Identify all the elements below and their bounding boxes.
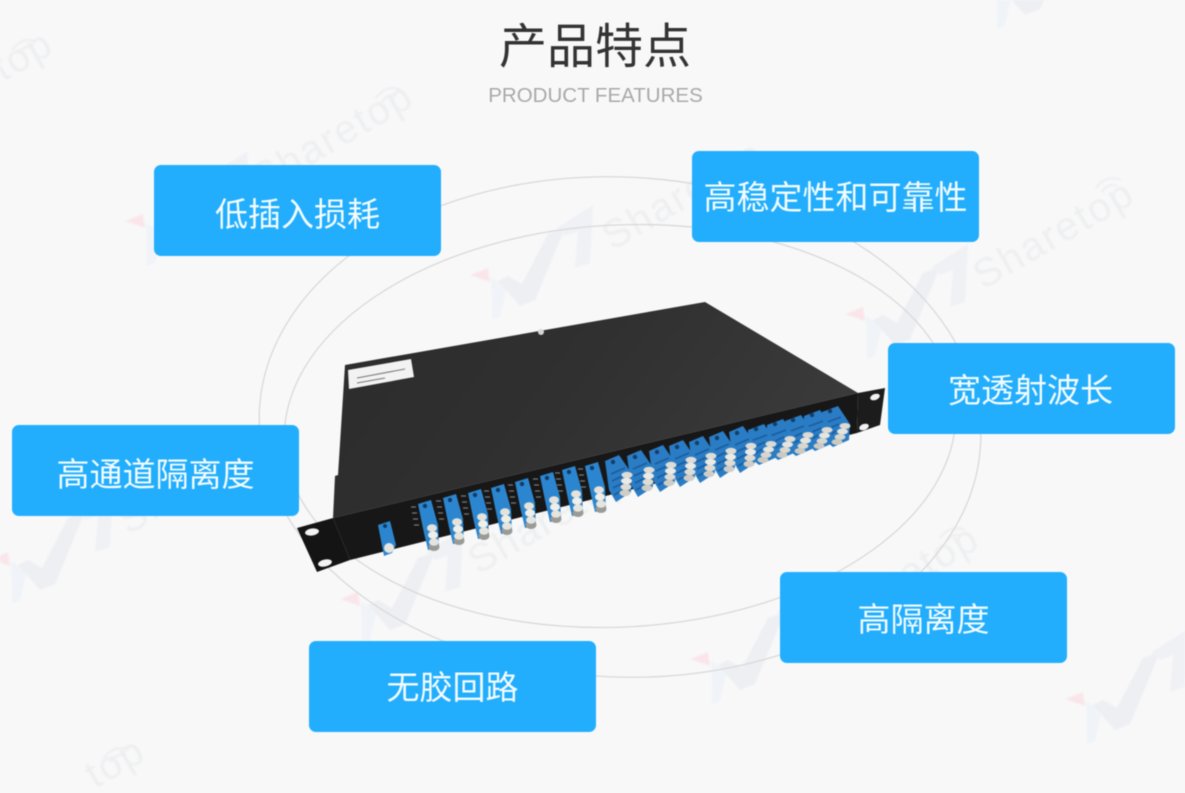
right mounting ear bbox=[857, 388, 885, 433]
feature box: high channel isolation: 高通道隔离度 bbox=[56, 456, 254, 493]
watermarks: Sharetop bbox=[244, 74, 421, 201]
watermarks: Sharetop bbox=[460, 456, 637, 583]
feature box: high stability and reliability bbox=[692, 151, 979, 242]
front panel bbox=[333, 393, 858, 560]
screw bbox=[538, 329, 544, 335]
feature box: high channel isolation bbox=[12, 425, 299, 516]
feature box: low insertion loss: 低插入损耗 bbox=[215, 196, 380, 233]
product: rack-mount fiber module bbox=[297, 302, 885, 572]
feature box: adhesive-free path bbox=[309, 641, 596, 732]
watermarks: Sharetop bbox=[594, 132, 771, 259]
single port connector bbox=[378, 521, 396, 556]
connector row bbox=[411, 406, 850, 551]
left mounting ear bbox=[297, 518, 350, 572]
feature box: wide passband bbox=[888, 343, 1175, 434]
feature box: high isolation bbox=[780, 572, 1067, 663]
watermarks: Sharetop bbox=[966, 171, 1142, 298]
watermarks: Sharetop bbox=[110, 416, 287, 543]
title: 产品特点 bbox=[499, 21, 691, 74]
subtitle: PRODUCT FEATURES bbox=[488, 84, 703, 107]
orbit ellipses bbox=[248, 161, 992, 693]
feature box: wide passband: 宽透射波长 bbox=[948, 372, 1113, 409]
feature box: adhesive-free path: 无胶回路 bbox=[386, 669, 518, 706]
watermarks: Sharetop bbox=[810, 516, 987, 643]
white label bbox=[348, 359, 414, 389]
feature box: low insertion loss bbox=[154, 165, 441, 256]
feature box: high stability and reliability: 高稳定性和可靠性 bbox=[704, 179, 968, 216]
feature box: high isolation: 高隔离度 bbox=[858, 601, 990, 638]
top cover bbox=[333, 302, 858, 518]
